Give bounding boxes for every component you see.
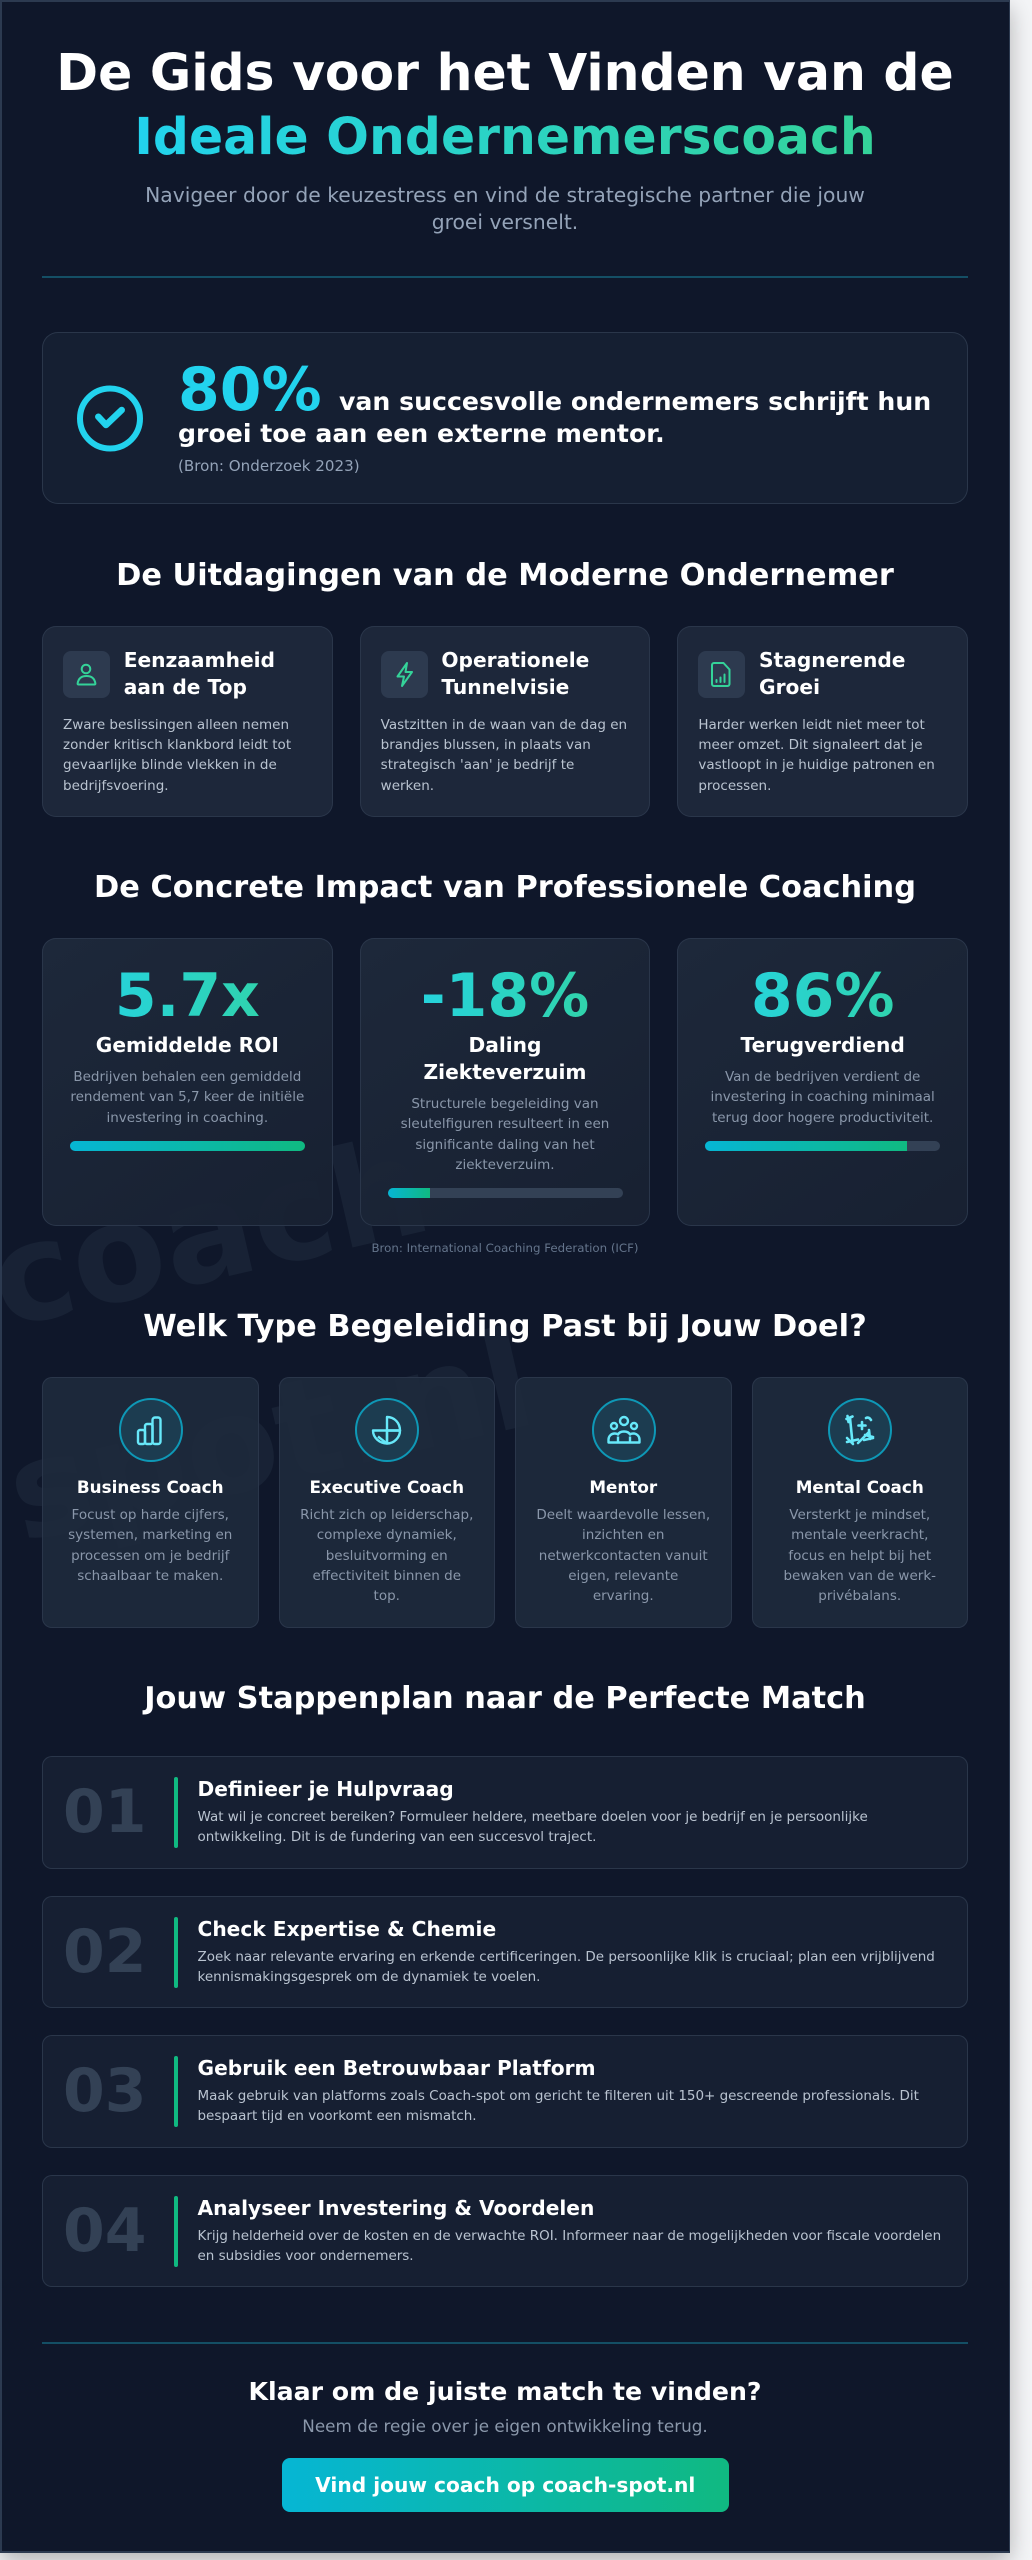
- type text: schaalbaar te maken.: [77, 1568, 223, 1584]
- step number: 02: [63, 1916, 146, 1986]
- panel: stagnerende groei: [677, 626, 968, 817]
- card text: Harder werken leidt niet meer tot: [698, 716, 925, 732]
- card title: Operationele: [441, 648, 589, 672]
- type text: privébalans.: [818, 1588, 901, 1604]
- call to action heading: Klaar om de juiste match te vinden?: [248, 2377, 762, 2406]
- progress bar: [705, 1141, 940, 1151]
- type text: ervaring.: [593, 1588, 654, 1604]
- type text: [536, 1507, 710, 1604]
- step text: [198, 2228, 941, 2264]
- type text: Deelt waardevolle lessen,: [536, 1507, 710, 1523]
- step title: Check Expertise & Chemie: [198, 1916, 496, 1940]
- type text: inzichten en: [582, 1527, 664, 1543]
- stat value: 5.7x: [115, 961, 260, 1031]
- title: [56, 43, 954, 166]
- icon: check circle: [77, 386, 143, 452]
- card text: [698, 716, 935, 794]
- card text: Vastzitten in de waan van de dag en: [381, 716, 627, 732]
- stat text: Structurele begeleiding van: [411, 1096, 599, 1112]
- accent bar: [174, 1916, 178, 1988]
- stat label: Terugverdiend: [741, 1033, 905, 1057]
- big number 80%: 80%: [178, 355, 322, 425]
- type text: Richt zich op leiderschap,: [300, 1507, 473, 1523]
- stat text: [70, 1069, 304, 1126]
- stat text: [401, 1096, 609, 1173]
- icon: bolt: [381, 651, 428, 698]
- accent bar: [174, 2056, 178, 2127]
- step number: 03: [63, 2056, 146, 2126]
- type text: besluitvorming en: [326, 1548, 448, 1564]
- stat text: ziekteverzuim.: [455, 1157, 555, 1173]
- card text: meer omzet. Dit signaleert dat je: [698, 737, 923, 753]
- card title: Stagnerende: [759, 648, 906, 672]
- stat value: [42, 961, 333, 1031]
- progress bar: [388, 1188, 623, 1198]
- card title: [124, 648, 275, 698]
- type text: processen om je bedrijf: [71, 1548, 229, 1564]
- stat label: Gemiddelde ROI: [96, 1033, 279, 1057]
- card text: werken.: [381, 778, 434, 794]
- stat value: [677, 961, 968, 1031]
- card text: processen.: [698, 778, 771, 794]
- panel: 80% key statistic: [42, 332, 968, 504]
- stat text: Van de bedrijven verdient de: [725, 1069, 920, 1085]
- source note: Bron: International Coaching Federation (ICF): [371, 1241, 639, 1255]
- type text: effectiviteit binnen de: [312, 1568, 461, 1584]
- step 1: [42, 1756, 968, 1868]
- type title: Business Coach: [77, 1477, 224, 1497]
- stat text: sleutelfiguren resulteert in een: [401, 1116, 609, 1132]
- card text: gevaarlijke blinde vlekken in de: [63, 757, 277, 773]
- type text: systemen, marketing en: [68, 1527, 232, 1543]
- step text: en subsidies voor ondernemers.: [198, 2248, 414, 2264]
- statistic sentence: [178, 387, 931, 448]
- step text: kennismakingsgesprek om de dynamiek te voelen.: [198, 1969, 540, 1985]
- type text: [300, 1507, 473, 1604]
- accent bar: [174, 1777, 178, 1848]
- stat label: [424, 1033, 586, 1084]
- stat text: rendement van 5,7 keer de initiële: [70, 1089, 304, 1105]
- stat text: [710, 1069, 935, 1126]
- type title: Mentor: [589, 1477, 657, 1497]
- card title: [441, 648, 589, 698]
- step title: Analyseer Investering & Voordelen: [198, 2196, 594, 2220]
- icon: group: [592, 1398, 656, 1462]
- panel: mentor: [515, 1377, 732, 1628]
- type text: bewaken van de werk-: [783, 1568, 936, 1584]
- stat value: 86%: [751, 961, 894, 1031]
- card text: strategisch 'aan' je bedrijf te: [381, 757, 574, 773]
- subtitle: groei versnelt.: [432, 210, 578, 234]
- step title: Gebruik een Betrouwbaar Platform: [198, 2056, 596, 2080]
- panel: executive coach: [278, 1377, 495, 1628]
- card text: vastloopt in je huidige patronen en: [698, 757, 935, 773]
- heading: stappenplan: Jouw Stappenplan naar de Perfecte Match: [144, 1681, 866, 1716]
- panel: mental coach: [752, 1377, 968, 1628]
- type title: Mental Coach: [796, 1477, 924, 1497]
- heading: impact: De Concrete Impact van Professionele Coaching: [94, 870, 916, 905]
- card text: brandjes blussen, in plaats van: [381, 737, 591, 753]
- call to action button: Vind jouw coach op coach-spot.nl: [315, 2473, 695, 2497]
- icon: user: [63, 651, 110, 698]
- watermark: spot.nl: spot.nl: [0, 1301, 547, 1574]
- statistic sentence: van succesvolle ondernemers schrijft hun: [339, 387, 931, 416]
- stat text: Bedrijven behalen een gemiddeld: [73, 1069, 301, 1085]
- step text: Maak gebruik van platforms zoals Coach-spot om gericht te filteren uit 150+ gescreende professionals. Dit: [198, 2088, 919, 2104]
- card title: Groei: [759, 674, 820, 698]
- icon: sparkles: [828, 1398, 892, 1462]
- type text: top.: [374, 1588, 400, 1604]
- progress bar: [70, 1141, 305, 1151]
- type text: Versterkt je mindset,: [789, 1507, 930, 1523]
- panel: tunnelvisie: [360, 626, 650, 817]
- card title: Eenzaamheid: [124, 648, 275, 672]
- panel: ROI: [42, 938, 333, 1226]
- type text: mentale veerkracht,: [791, 1527, 928, 1543]
- type text: Focust op harde cijfers,: [72, 1507, 229, 1523]
- stat text: terug door hogere productiviteit.: [712, 1110, 933, 1126]
- icon: pie chart: [355, 1398, 419, 1462]
- step text: bespaart tijd en voorkomt een mismatch.: [198, 2108, 477, 2124]
- accent bar: [174, 2196, 178, 2266]
- icon: document chart: [698, 651, 745, 698]
- card text: [63, 716, 291, 794]
- stat text: significante daling van het: [415, 1137, 595, 1153]
- call to action text: Neem de regie over je eigen ontwikkeling terug.: [302, 2416, 708, 2436]
- card title: [759, 648, 906, 698]
- stat label: Daling: [468, 1033, 542, 1057]
- card title: Tunnelvisie: [441, 674, 569, 698]
- step text: [198, 1809, 868, 1845]
- panel: terugverdiend: [677, 938, 968, 1226]
- panel: business coach: [42, 1377, 258, 1628]
- title: De Gids voor het Vinden van de: [56, 43, 954, 102]
- stat value: -18%: [421, 961, 589, 1031]
- stat text: investering in coaching minimaal: [710, 1089, 935, 1105]
- step 2: [42, 1896, 968, 2008]
- type text: [68, 1507, 232, 1584]
- card text: bedrijfsvoering.: [63, 778, 169, 794]
- step text: [198, 2088, 919, 2124]
- stat label: Ziekteverzuim: [424, 1060, 586, 1084]
- icon: bars: [119, 1398, 183, 1462]
- step title: Definieer je Hulpvraag: [198, 1777, 454, 1801]
- step text: [198, 1948, 935, 1985]
- call to action button: [282, 2458, 729, 2512]
- title: Ideale Ondernemerscoach: [134, 107, 876, 166]
- step 4: [42, 2174, 968, 2287]
- step number: 04: [63, 2196, 146, 2266]
- step text: Wat wil je concreet bereiken? Formuleer heldere, meetbare doelen voor je bedrijf en je persoonlijke: [198, 1809, 868, 1825]
- type text: netwerkcontacten vanuit: [539, 1548, 708, 1564]
- stat value: [360, 961, 650, 1031]
- card text: Zware beslissingen alleen nemen: [63, 716, 289, 732]
- type text: focus en helpt bij het: [788, 1548, 931, 1564]
- card text: zonder kritisch klankbord leidt tot: [63, 737, 291, 753]
- type text: complexe dynamiek,: [317, 1527, 457, 1543]
- card text: [380, 716, 627, 794]
- type text: [783, 1507, 936, 1604]
- subtitle: [145, 182, 865, 234]
- step 3: [42, 2035, 968, 2148]
- heading: type begeleiding: Welk Type Begeleiding Past bij Jouw Doel?: [143, 1309, 867, 1344]
- panel: ziekteverzuim: [360, 938, 650, 1226]
- subtitle: Navigeer door de keuzestress en vind de strategische partner die jouw: [145, 182, 865, 206]
- step text: Krijg helderheid over de kosten en de verwachte ROI. Informeer naar de mogelijkheden voor fiscale voordelen: [198, 2228, 941, 2244]
- panel: eenzaamheid: [42, 626, 333, 817]
- card title: aan de Top: [124, 674, 247, 698]
- source note: (Bron: Onderzoek 2023): [178, 456, 360, 474]
- step text: ontwikkeling. Dit is de fundering van een succesvol traject.: [198, 1829, 596, 1845]
- statistic sentence: groei toe aan een externe mentor.: [178, 419, 665, 448]
- step number: 01: [63, 1777, 146, 1847]
- step text: Zoek naar relevante ervaring en erkende certificeringen. De persoonlijke klik is cruciaal; plan een vrijblijvend: [198, 1948, 935, 1964]
- type title: Executive Coach: [309, 1477, 464, 1497]
- heading: uitdagingen: De Uitdagingen van de Moderne Ondernemer: [116, 558, 894, 593]
- type text: eigen, relevante: [568, 1568, 678, 1584]
- stat text: investering in coaching.: [106, 1110, 268, 1126]
